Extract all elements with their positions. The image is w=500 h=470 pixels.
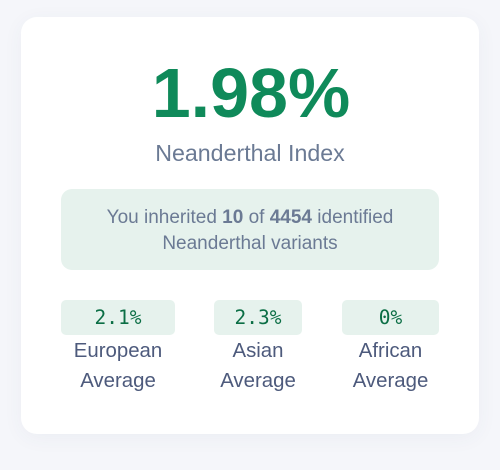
subtitle: Neanderthal Index: Neanderthal Index: [155, 140, 345, 166]
headline: 1.98%: 1.98%: [152, 54, 350, 132]
callout: inherited variants: [61, 189, 439, 270]
label: African Average: African: [359, 340, 422, 362]
value: 2.3%: 2.3%: [235, 306, 281, 329]
value: 2.3%: [214, 300, 302, 335]
value: 0%: [342, 300, 439, 335]
label: African Average: Average: [353, 370, 428, 392]
label: European Average: [74, 340, 162, 392]
label: European Average: European: [74, 340, 162, 362]
stat: African average: [342, 300, 439, 392]
label: Asian Average: Asian: [232, 340, 284, 362]
label: Asian Average: [220, 340, 296, 392]
stat: European average: [61, 300, 175, 392]
label: European Average: Average: [80, 370, 156, 392]
callout: inherited variants: You inherited 10 of 4454 identified: [107, 207, 393, 228]
label: African Average: [352, 340, 428, 392]
stat: Asian average: [214, 300, 302, 392]
value: 2.1%: [61, 300, 175, 335]
callout: inherited variants: Neanderthal variants: [162, 232, 338, 254]
value: 2.1%: 2.1%: [95, 306, 141, 329]
label: Asian Average: Average: [220, 370, 296, 392]
value: 0%: 0%: [379, 306, 402, 329]
